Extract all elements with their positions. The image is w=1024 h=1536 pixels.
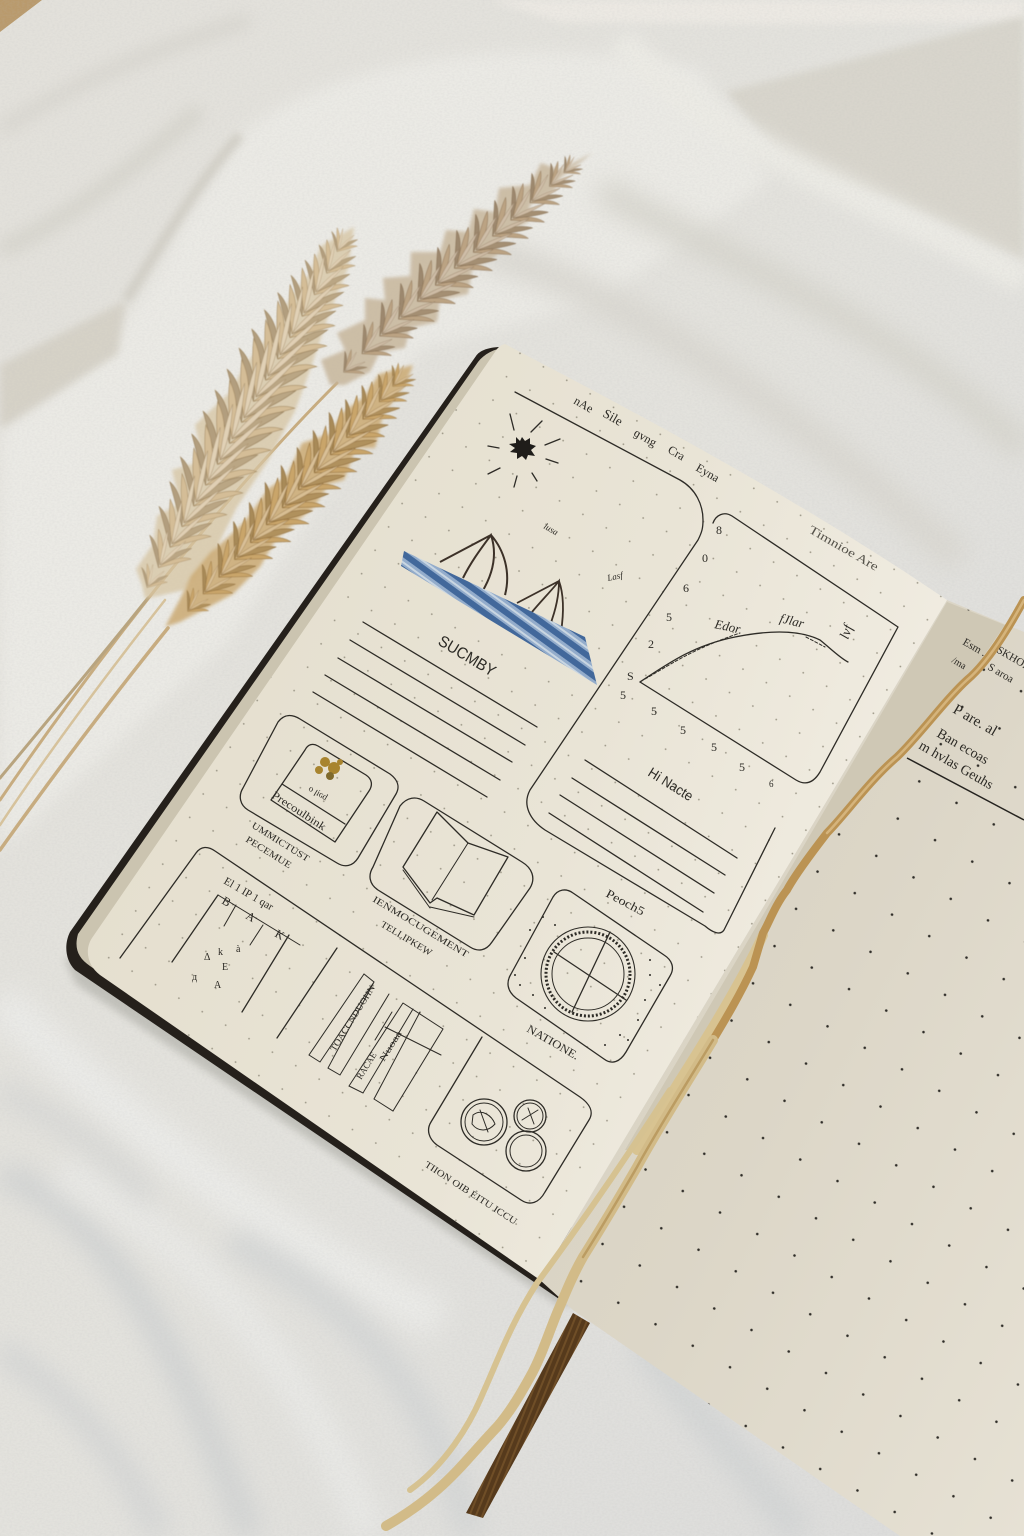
speckles: [514, 916, 661, 1046]
small table: A: [244, 908, 258, 925]
main strand lower: [386, 1040, 713, 1526]
notebook: [64, 344, 1024, 1536]
page block edge: [76, 347, 540, 1278]
chart axis values: 0: [702, 551, 708, 565]
panel: top illustration frame: [313, 392, 775, 933]
gold bookmark ribbons: [386, 600, 1024, 1526]
small table: д: [192, 972, 197, 983]
panel: badge card: Precoulbink: [269, 789, 328, 834]
dark bookmark ribbon: [466, 1313, 590, 1518]
icon: gold flower: [315, 757, 343, 780]
header text: nAe: [572, 393, 596, 416]
caption: TIION OIB ÉITU ICCU: [422, 1158, 520, 1227]
labels: Peoch5: [604, 886, 647, 918]
right page header rule and text: /ma: [950, 655, 968, 672]
right page header rule and text: P are. al: [950, 702, 1000, 740]
panel: line chart: fJlar: [778, 610, 807, 631]
panel: compass card: [508, 886, 672, 1063]
chart axis values: 6: [683, 581, 689, 595]
lower cloth folds: [0, 1000, 440, 1320]
panel: bottom tables and coins: [120, 847, 591, 1227]
panel: badge card: o ꞁiɢd: [307, 783, 330, 802]
small table: Δ: [204, 952, 211, 963]
column table: [309, 974, 443, 1111]
small labels: lusa: [542, 521, 560, 537]
fold band beside the gutter: [625, 602, 1005, 1150]
icon: sun: [488, 414, 560, 487]
chart axis values: [620, 523, 774, 789]
panel: line chart: lvf: [838, 621, 857, 641]
caption: IENMOCUGEMENT: [370, 895, 470, 960]
upper thin strand: [410, 1090, 670, 1490]
small table: А: [214, 980, 222, 991]
notebook dark cover: [66, 347, 575, 1301]
panel: book card: TELLIPKEW: [378, 920, 433, 958]
chart title: Timnioe Are: [806, 522, 881, 574]
page stack edge strand: [637, 935, 763, 1150]
wheat spike: upper right: [321, 152, 592, 385]
wheat spike: lower golden: [165, 359, 419, 627]
chart axis values: 5: [680, 723, 686, 737]
column table: TOACCNDUOHN: [328, 983, 377, 1053]
icon: compass seal: [541, 927, 635, 1021]
panel: top illustration frame: ɡvng: [632, 425, 659, 450]
column table: Nuoaa: [377, 1029, 404, 1063]
panel: top illustration frame: Sile: [600, 406, 626, 429]
upper right shaded patch: [725, 16, 1024, 262]
bright centre drape: [0, 52, 770, 850]
chart axis values: 5: [666, 610, 672, 624]
chart annotations: Edor: [712, 616, 743, 637]
column table: RACAE: [354, 1050, 379, 1081]
chart axis values: 5: [620, 688, 626, 702]
top left folds: [0, 20, 250, 130]
main strand upper: [713, 600, 1024, 1040]
panel: book card: [370, 798, 533, 960]
icon: coins: [461, 1099, 546, 1171]
notebook cover shadow: [64, 958, 600, 1306]
right page header rule and text: S aroa: [986, 661, 1016, 686]
heading and lines: notes: Hi Nacte: [645, 764, 696, 804]
panel: line chart: [620, 514, 898, 789]
panel: compass card: NATIONE.: [524, 1023, 581, 1063]
right page header rule and text: [907, 636, 1024, 820]
heading and lines: notes: [549, 760, 737, 912]
right page header rule and text: m hvlas Geuhs: [916, 738, 996, 793]
wheat stems: [0, 383, 337, 850]
small table: [192, 875, 300, 991]
heading: summary: SUCMBY: [435, 633, 499, 681]
panel: top illustration frame: Eyna: [694, 460, 722, 485]
small table: k: [218, 947, 223, 958]
washi tape: blue stripes: [401, 551, 597, 685]
panel: badge card: PECEMUE: [243, 835, 293, 871]
chart axis values: 2: [648, 637, 654, 651]
chart axis values: 5: [711, 740, 717, 754]
wood tabletop corner: [0, 0, 42, 32]
right side folds: [600, 190, 1024, 450]
small table: à: [236, 944, 241, 955]
chart axis values: 5: [739, 760, 745, 774]
icon: mountains: [440, 535, 563, 632]
chart axis values: S: [627, 669, 634, 683]
small table: El 1 IP 1 qar: [222, 875, 276, 913]
panel: top illustration frame: Cra: [666, 442, 688, 464]
caption: UMMICTUST: [249, 821, 311, 865]
icon: open book: [403, 812, 508, 917]
chart axis values: 5: [651, 704, 657, 718]
right page header rule and text: Ban ecoas: [934, 726, 991, 768]
upper far fold: [490, 0, 1024, 24]
panel: badge card: [240, 716, 398, 871]
chart axis values: 6: [769, 779, 774, 789]
small table: E: [222, 962, 228, 973]
beige fold wedge: [0, 300, 126, 429]
left page: [88, 344, 947, 1280]
right page: [540, 600, 1024, 1536]
chart axis values: 8: [716, 523, 722, 537]
wheat spike: fluffy left: [134, 224, 361, 599]
small table: K: [272, 926, 287, 943]
small table: B: [220, 893, 233, 910]
right page header rule and text: Esm .: [960, 636, 988, 659]
summary writing lines: [313, 622, 537, 797]
panel: top illustration frame: Lasf: [605, 570, 625, 583]
